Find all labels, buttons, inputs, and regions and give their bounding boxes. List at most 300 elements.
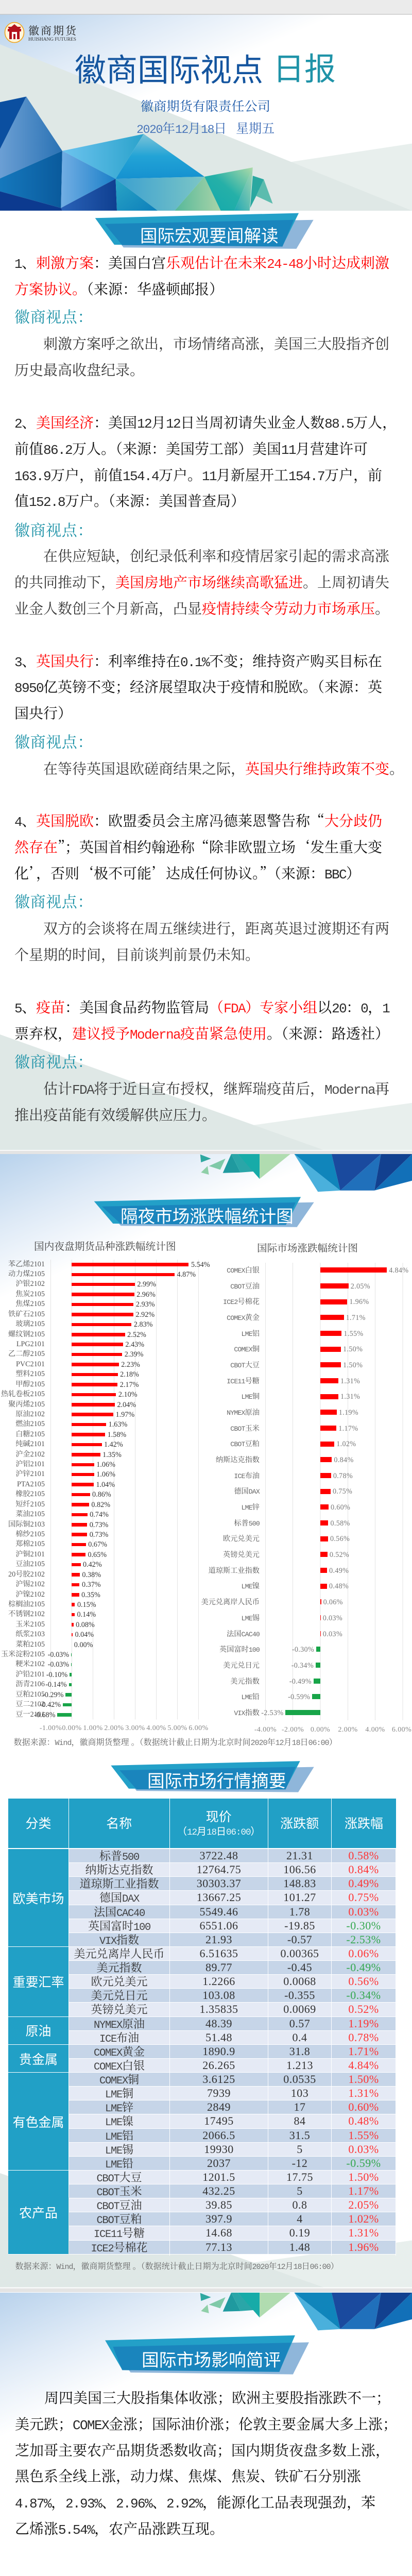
market summary table: 1.17% [348,2184,379,2197]
bar chart: international markets [201,1265,408,1718]
market summary table: 0.8 [293,2198,307,2211]
bar chart: domestic night session: 2.17% [120,1381,139,1389]
viewpoint text 1: 刺激方案呼之欲出，市场情绪高涨，美国三大股指齐创 [43,333,389,353]
viewpoint text 1 [14,333,389,380]
market summary table: 原油 [25,2021,52,2040]
market summary table: 84 [294,2114,306,2127]
market summary table: 17 [294,2100,306,2113]
market summary table: 5549.46 [200,1905,238,1918]
market summary table [8,1799,396,2256]
viewpoint text 5: 推出疫苗能有效缓解供应压力。 [14,1104,216,1125]
date: 2020年12月18日 星期五 [136,118,274,137]
market summary table: 0.4 [293,2031,307,2044]
market summary table: 19930 [204,2143,234,2156]
market summary table: 48.39 [205,2016,232,2030]
bar chart: international markets: LME锌 [242,1502,260,1512]
market summary table: 美元兑日元 [91,1987,147,2003]
bar chart: domestic night session: 0.15% [77,1601,96,1609]
market summary table: 1.50% [348,2171,379,2183]
bar chart: international markets: 1.02% [336,1440,356,1448]
bar chart: international markets: 2.05% [351,1282,370,1291]
market summary table: 1.35835 [200,2003,238,2015]
market summary table: 2037 [207,2157,231,2170]
news item 2: 值152.8万户。（来源：美国普查局） [14,490,245,511]
market summary table: 0.00365 [280,1947,319,1960]
market overview text: 黑色系全线上涨，动力煤、焦煤、焦炭、铁矿石分别涨 [15,2465,361,2486]
market summary table: 1.213 [286,2059,313,2072]
bar chart: domestic night session: 豆二2102 [15,1700,45,1708]
market summary table: -0.30% [346,1919,381,1932]
market summary table: 美元指数 [96,1959,142,1975]
market summary table: 0.0535 [283,2073,316,2086]
chart grid and axes: -1.00% [40,1724,62,1732]
bar chart: international markets: 0.03% [323,1614,342,1622]
news item 5: 票弃权，建议授予Moderna疫苗紧急使用。（来源：路透社） [14,1023,389,1043]
market summary table: 0.19 [289,2226,310,2239]
news item 5 [14,996,389,1043]
market overview text: 芝加哥主要农产品期货悉数收高；国内期货夜盘多数上涨， [15,2439,390,2460]
bar chart: domestic night session: 菜油2105 [15,1510,45,1518]
bar chart: domestic night session: -0.68% [34,1711,55,1719]
market summary table: -0.57 [287,1933,312,1946]
bar chart: international markets: 0.52% [330,1551,349,1559]
bar chart: domestic night session: 沪铝2101 [15,1460,45,1468]
slide 1 background [0,14,412,211]
bar chart: domestic night session: 2.93% [136,1300,155,1309]
market summary table: 2066.5 [202,2129,235,2141]
title accent: 日报 [273,43,336,89]
bar chart: domestic night session: 焦煤2105 [15,1300,45,1308]
viewpoint text 5 [14,1078,389,1125]
news item 5: 5、疫苗：美国食品药物监管局（FDA）专家小组以20：0，1 [14,996,389,1017]
bar chart: international markets: CBOT大豆 [230,1360,260,1370]
market summary table: 51.48 [205,2031,232,2044]
chart title: international markets: 国际市场涨跌幅统计图 [257,1240,358,1254]
market summary table: 标普500 [99,1848,139,1863]
bar chart: domestic night session: 2.83% [134,1320,152,1329]
market summary table: 103.08 [202,1989,235,2002]
bar chart: domestic night session: 动力煤2105 [8,1270,45,1278]
logo: HUISHANG FUTURES [28,37,76,42]
bar chart: domestic night session: 5.54% [191,1261,210,1269]
market summary table: 103 [291,2087,308,2099]
bar chart: international markets: 1.50% [343,1345,363,1353]
slide 3 corner art [200,2293,412,2330]
bar chart: domestic night session: -0.03% [48,1651,69,1659]
bar chart: domestic night session [1,1260,210,1719]
chart grid and axes: 5.00% [167,1724,187,1732]
bar chart: domestic night session: 纸浆2103 [15,1630,45,1638]
news item 4: 然存在”；英国首相约翰逊称“除非欧盟立场‘发生重大变 [14,836,382,857]
market summary table: 17.75 [286,2171,313,2183]
market summary table: 39.85 [205,2198,232,2211]
bar chart: international markets: COMEX黄金 [227,1312,260,1323]
market summary table: 3722.48 [200,1849,238,1862]
bar chart: domestic night session: 短纤2105 [15,1500,45,1509]
bar chart: international markets: LME铝 [242,1328,260,1338]
bar chart: international markets: COMEX白银 [227,1265,260,1275]
market summary table: -0.49% [346,1961,381,1974]
bar chart: domestic night session: 玉米2105 [15,1620,45,1629]
bar chart: domestic night session: -0.03% [48,1660,69,1669]
news item 2 [14,412,397,511]
market summary table: LME铝 [105,2127,133,2143]
bar chart: domestic night session: 苯乙烯2101 [8,1260,45,1268]
market summary table: 0.52% [348,2003,379,2015]
section banner: market summary [111,1761,314,1792]
bar chart: international markets: 美元指数 [230,1676,260,1686]
chart grid and axes: -2.00% [282,1726,304,1734]
market summary table: LME铅 [105,2155,133,2171]
bar chart: domestic night session: 2.10% [118,1391,138,1399]
market summary table: 欧元兑美元 [91,1973,147,1989]
market summary table: 1.96% [348,2240,379,2253]
top grey strip [0,0,412,14]
logo [5,23,78,42]
bar chart: international markets: ICE2号棉花 [223,1296,260,1307]
bar chart: international markets: LME镍 [242,1581,260,1591]
market summary table: 欧美市场 [12,1889,64,1907]
bar chart: domestic night session: 甲醇2105 [15,1380,45,1388]
bar chart: international markets: 欧元兑美元 [223,1533,260,1544]
market summary table: CBOT豆粕 [97,2211,142,2227]
market summary table: 1.55% [348,2129,379,2141]
chart grid and axes: 6.00% [392,1726,411,1734]
bar chart: domestic night session: 2.39% [125,1350,143,1359]
market summary table: 2.05% [348,2198,379,2211]
bar chart: domestic night session: 1.42% [104,1440,123,1449]
bar chart: international markets: 1.50% [343,1361,363,1369]
bar chart: domestic night session: 0.38% [82,1571,101,1579]
bar chart: international markets: LME铜 [242,1391,260,1401]
market summary table: 5 [297,2143,303,2156]
market summary table: 6.51635 [200,1947,238,1960]
market summary table: 0.0069 [283,2003,316,2015]
market summary table: CBOT豆油 [97,2197,142,2213]
chart grid and axes: 6.00% [188,1724,209,1732]
market summary table: 0.78% [348,2031,379,2044]
bar chart: domestic night session: 焦炭2105 [15,1290,45,1298]
viewpoint text 1: 历史最高收盘纪录。 [14,359,144,380]
data source note 2: 数据来源：Wind，徽商期货整理 。（数据统计截止日期为北京时间2020年12月18日06:00） [15,2260,339,2272]
market summary table: 77.13 [205,2240,232,2253]
chart grid and axes [40,1260,411,1734]
market summary table: 有色金属 [12,2112,64,2131]
section banner: macro news: 国际宏观要闻解读 [140,222,279,247]
market overview text [15,2387,397,2538]
news item 2: 2、美国经济：美国12月12日当周初请失业金人数88.5万人， [14,412,397,432]
chart grid and axes: 1.00% [83,1724,103,1732]
market summary table: CBOT玉米 [97,2183,142,2199]
bar chart: domestic night session: PVC2101 [16,1360,45,1368]
bar chart: domestic night session: 乙二醇2105 [8,1350,45,1358]
market summary table: CBOT大豆 [97,2169,142,2185]
market summary table: 13667.25 [197,1891,241,1904]
market summary table: 德国DAX [99,1889,139,1905]
market summary table: 1890.9 [202,2045,235,2058]
slide 1 polygon art [0,96,273,211]
market summary table: 432.25 [202,2184,235,2197]
bar chart: domestic night session: 沪金2102 [15,1450,45,1459]
news item 2: 163.9万户，前值154.4万户。11月新屋开工154.7万户，前 [14,464,382,485]
market summary table: 农产品 [19,2203,58,2222]
section banner: overnight stats: 隔夜市场涨跌幅统计图 [121,1202,294,1227]
bar chart: international markets: 0.78% [333,1472,353,1480]
news item 4: 4、英国脱欧：欧盟委员会主席冯德莱恩警告称“大分歧仍 [14,810,382,831]
bar chart: domestic night session: 沥青2106 [15,1680,45,1688]
bar chart: domestic night session: 2.99% [137,1280,156,1289]
market summary table: 0.0068 [283,1975,316,1988]
slide 1 footer background [0,1035,412,1154]
bar chart: domestic night session: 粳米2102 [15,1660,45,1668]
bar chart: domestic night session: 1.35% [102,1451,122,1459]
bar chart: international markets: LME锡 [242,1613,260,1623]
market summary table: VIX指数 [99,1931,139,1947]
market summary table: 1.48 [289,2240,310,2253]
market summary table: 4.84% [348,2059,379,2072]
company name: 徽商期货有限责任公司 [141,96,270,115]
section banner: market commentary [105,2335,309,2375]
chart grid and axes: -4.00% [254,1726,277,1734]
bar chart: international markets: 0.84% [334,1456,354,1464]
bar chart: domestic night session: 豆油2105 [15,1560,45,1568]
market summary table: 纳斯达克指数 [85,1861,153,1877]
viewpoint text 2: 业金人数创三个月新高，凸显疫情持续令劳动力市场承压。 [14,598,389,618]
news item 3: 3、英国央行：利率维持在0.1%不变；维持资产购买目标在 [14,650,382,671]
market summary table: ICE布油 [99,2029,139,2045]
bar chart: domestic night session: 0.00% [74,1641,93,1649]
market summary table: 道琼斯工业指数 [79,1875,159,1891]
bar chart: domestic night session: 橡胶2105 [15,1490,45,1498]
market summary table: 0.75% [348,1891,379,1904]
chart grid and axes: 0.00% [311,1726,330,1734]
bar chart: domestic night session: 塑料2105 [15,1370,45,1378]
market summary table: 106.56 [283,1863,316,1876]
news item 1: 方案协议。（来源：华盛顿邮报） [14,278,224,299]
market summary table: 6551.06 [200,1919,238,1932]
bar chart: domestic night session: 0.14% [77,1611,96,1619]
bar chart: international markets: 0.56% [330,1535,350,1543]
market summary table: 重要汇率 [12,1972,64,1991]
section banner: market summary: 国际市场行情摘要 [147,1767,286,1792]
market summary table: ICE11号糖 [94,2225,145,2241]
bar chart: domestic night session: 沪锡2102 [15,1580,45,1588]
chart grid and axes: 0.00% [62,1724,82,1732]
bar chart: international markets: COMEX铜 [234,1344,260,1354]
bar chart: international markets: 0.06% [323,1598,343,1606]
bar chart: domestic night session: 0.04% [75,1631,94,1639]
market summary table: 0.84% [348,1863,379,1876]
bar chart: domestic night session: 2.43% [125,1341,144,1349]
bar chart: international markets: NYMEX原油 [227,1407,260,1417]
market summary table: 贵金属 [19,2049,58,2068]
news item 4 [14,810,382,883]
bar chart: domestic night session: 0.74% [90,1511,109,1519]
bar chart: domestic night session: 0.73% [90,1531,108,1539]
bar chart: domestic night session: -0.42% [40,1701,61,1709]
market summary table: 现价 [206,1807,232,1825]
market summary table: 1.71% [348,2045,379,2058]
bar chart: international markets: 1.31% [340,1393,360,1401]
bar chart: domestic night session: 玻璃2105 [15,1320,45,1328]
market summary table: -0.45 [287,1961,312,1974]
market summary table: 涨跌额 [280,1814,319,1832]
bar chart: domestic night session: 铁矿石2105 [8,1310,45,1318]
bar chart: domestic night session: -0.29% [42,1691,63,1699]
bar chart: domestic night session: 2.92% [136,1311,154,1319]
bar chart: domestic night session: 0.08% [76,1621,95,1629]
bar chart: international markets: VIX指数 [234,1707,260,1718]
chart grid and axes: 4.00% [365,1726,385,1734]
market summary table: -12 [292,2157,307,2170]
bar chart: international markets: 1.71% [346,1314,366,1322]
section banner: market commentary: 国际市场影响简评 [142,2346,281,2371]
bar chart: international markets: 1.31% [340,1377,360,1385]
market summary table: 31.8 [289,2045,310,2058]
section banner: macro news [95,213,314,249]
bar chart: international markets: 美元兑日元 [223,1660,260,1670]
market summary table: 21.93 [205,1933,232,1946]
bar chart: domestic night session: 0.65% [88,1551,107,1559]
bar chart: domestic night session: -0.10% [46,1671,67,1679]
news item 1: 1、刺激方案：美国白宫乐观估计在未来24-48小时达成刺激 [14,252,389,273]
market summary table: -2.53% [346,1933,381,1946]
market summary table: 2849 [207,2100,231,2113]
market summary table: 12764.75 [197,1863,241,1876]
market summary table: 1.02% [348,2212,379,2225]
bar chart: domestic night session: 菜粕2105 [15,1640,45,1649]
market summary table: 美元兑离岸人民币 [74,1945,165,1961]
market summary table: 0.57 [289,2016,310,2030]
bar chart: domestic night session: 郑棉2105 [15,1540,45,1548]
viewpoint text 2: 的共同推动下，美国房地产市场继续高歌猛进。上周初请失 [14,571,389,592]
market summary table: 17495 [204,2114,234,2127]
market summary table: -19.85 [284,1919,315,1932]
bar chart: domestic night session: 2.96% [136,1291,156,1299]
market overview text: 4.87%，2.93%、2.96%、2.92%，能源化工品表现强劲，苯 [15,2492,375,2512]
slide 2 corner art [200,1154,412,1192]
viewpoint heading 3: 徽商视点： [14,730,93,752]
viewpoint text 2: 在供应短缺，创纪录低利率和疫情居家引起的需求高涨 [43,545,389,566]
bar chart: domestic night session: 沪铅2101 [15,1670,45,1679]
viewpoint heading 4: 徽商视点： [14,889,93,912]
market summary table: COMEX铜 [99,2071,139,2087]
market summary table: 7939 [207,2087,231,2099]
bar chart: domestic night session: 聚丙烯2105 [8,1400,45,1409]
market summary table: COMEX黄金 [94,2043,145,2059]
bar chart: domestic night session: 玉米淀粉2105 [1,1650,45,1658]
bar chart: domestic night session: 1.04% [96,1481,115,1489]
bar chart: international markets: 1.55% [344,1330,364,1338]
market summary table: 0.49% [348,1877,379,1890]
bar chart: domestic night session: 不锈钢2102 [8,1610,45,1618]
bar chart: international markets: CBOT豆粕 [230,1438,260,1449]
bar chart: domestic night session: 0.35% [81,1591,100,1599]
slide 3 background [0,2293,412,2576]
bar chart: international markets: 0.60% [331,1503,350,1512]
bar chart: domestic night session: 1.63% [109,1420,127,1429]
bar chart: international markets: 法国CAC40 [227,1628,260,1638]
market summary table: NYMEX原油 [94,2015,145,2031]
bar chart: international markets: LME铅 [242,1691,260,1702]
news item 4: 化’，否则‘极不可能’达成任何协议。”（来源：BBC） [14,862,360,883]
market summary table: -0.34% [346,1989,381,2002]
bar chart: domestic night session: PTA2105 [17,1480,45,1488]
bar chart: domestic night session: 豆一2101 [15,1710,45,1719]
bar chart: domestic night session: 燃油2105 [15,1420,45,1428]
bar chart: international markets: 1.19% [339,1409,358,1417]
bar chart: international markets: 1.17% [338,1425,358,1433]
market overview text: 周四美国三大股指集体收涨；欧洲主要股指涨跌不一； [44,2387,390,2408]
market summary table: 4 [297,2212,303,2225]
news item 3: 国央行） [14,702,72,723]
market overview text: 乙烯涨5.54%，农产品涨跌互现。 [15,2518,224,2538]
market summary table: LME锡 [105,2141,133,2157]
market summary table: 14.68 [205,2226,232,2239]
bar chart: international markets: 1.96% [349,1298,369,1306]
market summary table: 397.9 [205,2212,232,2225]
market summary table: 21.31 [286,1849,313,1862]
bar chart: international markets: 0.75% [333,1487,352,1496]
bar chart: international markets: -0.34% [291,1662,314,1670]
bar chart: international markets: CBOT玉米 [230,1423,260,1433]
market summary table: 法国CAC40 [94,1903,145,1920]
bar chart: domestic night session: 热轧卷板2105 [1,1390,45,1398]
bar chart: domestic night session: 沪银2102 [15,1280,45,1288]
market summary table: 0.06% [348,1947,379,1960]
market summary table: 1.19% [348,2016,379,2030]
bar chart: domestic night session: 纯碱2101 [15,1440,45,1448]
bar chart: international markets: -2.53% [261,1709,283,1717]
news item 3 [14,650,382,723]
market summary table: 30303.37 [197,1877,241,1890]
title: 徽商国际视点 [75,44,263,90]
bar chart: domestic night session: 4.87% [177,1270,196,1279]
market summary table: 1201.5 [202,2171,235,2183]
market summary table: 101.27 [283,1891,316,1904]
news item 1 [14,252,389,299]
viewpoint heading 1: 徽商视点： [14,304,93,327]
viewpoint heading 5: 徽商视点： [14,1049,93,1072]
slide 2 background [0,1154,412,2292]
chart grid and axes: 3.00% [125,1724,145,1732]
market summary table: 148.83 [283,1877,316,1890]
market summary table: 1.78 [289,1905,310,1918]
bar chart: domestic night session: 1.06% [96,1461,115,1469]
bar chart: international markets: 道琼斯工业指数 [209,1565,260,1575]
market summary table: （12月18日06:00） [177,1824,261,1838]
market summary table: 1.50% [348,2073,379,2086]
viewpoint text 4: 双方的会谈将在周五继续进行，距离英退过渡期还有两 [43,918,389,938]
bar chart: domestic night session: 20号胶2102 [8,1570,45,1579]
market summary table: LME锌 [105,2099,133,2115]
bar chart: domestic night session: 豆粕2105 [15,1690,45,1699]
chart title: domestic night session: 国内夜盘期货品种涨跌幅统计图 [34,1238,176,1253]
market summary table: 0.48% [348,2114,379,2127]
bar chart: international markets: CBOT豆油 [230,1281,260,1291]
bar chart: domestic night session: 棕榈油2105 [8,1600,45,1608]
market summary table: 0.60% [348,2100,379,2113]
bar chart: domestic night session: 0.73% [90,1521,108,1529]
viewpoint text 4 [14,918,389,964]
market summary table: 0.03% [348,1905,379,1918]
market summary table: 0.03% [348,2143,379,2156]
bar chart: domestic night session: 0.86% [92,1490,111,1499]
bar chart: domestic night session: 2.18% [120,1370,139,1379]
bar chart: domestic night session: 2.04% [117,1400,136,1409]
bar chart: international markets: ICE布油 [234,1470,260,1481]
bar chart: domestic night session: 白糖2105 [15,1430,45,1438]
